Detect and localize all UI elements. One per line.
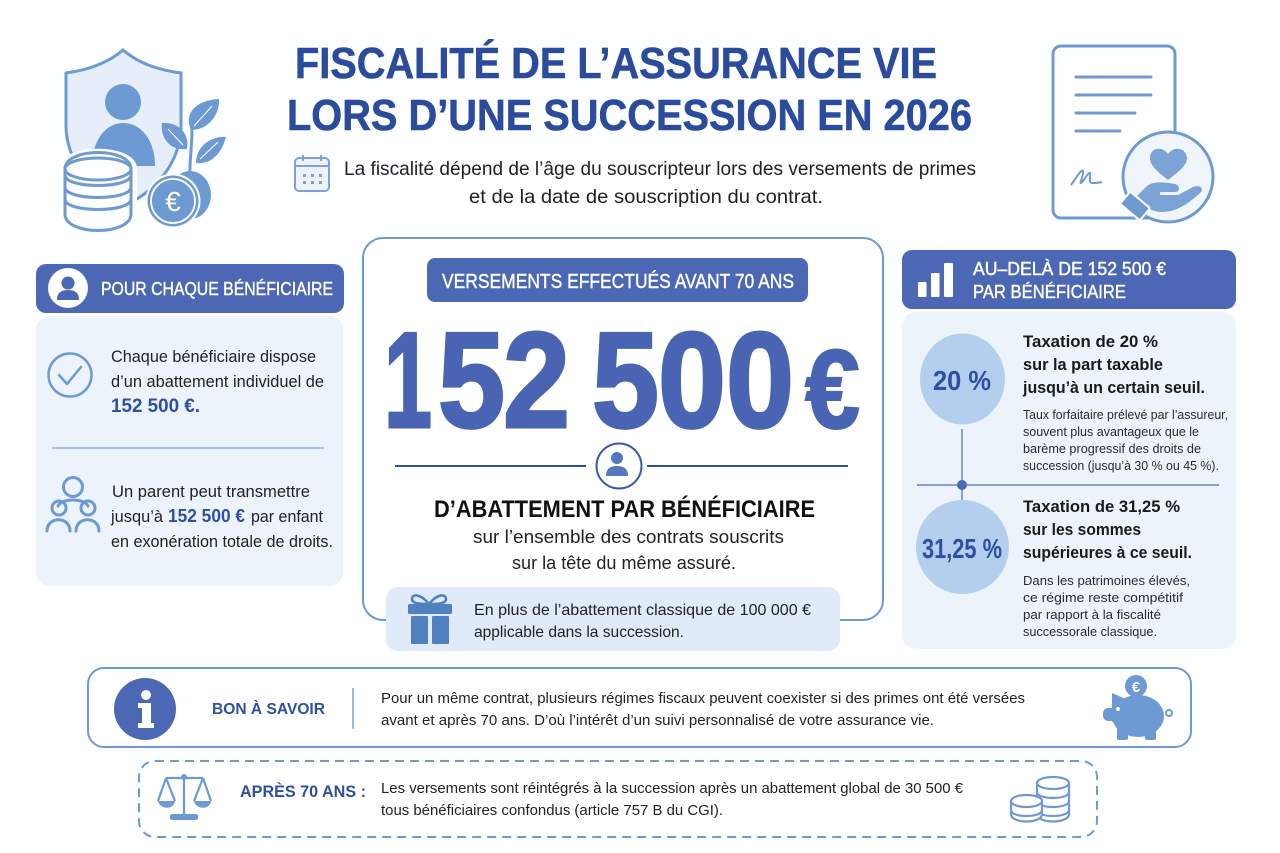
subtitle xyxy=(344,158,976,208)
header: pour chaque bénéficiaire: POUR CHAQUE BÉNÉFICIAIRE xyxy=(101,279,333,299)
header: au-delà de 152 500 €: PAR BÉNÉFICIAIRE xyxy=(973,282,1126,302)
text: versements réintégrés xyxy=(381,780,964,819)
text: transmission parent enfant: en exonération totale de droits. xyxy=(111,533,333,551)
text: taxation de 31,25 % xyxy=(1023,497,1192,639)
icon: check circle xyxy=(48,354,92,396)
text: transmission parent enfant: jusqu’à xyxy=(110,508,164,526)
text: ensemble des contrats: sur l’ensemble des contrats souscrits xyxy=(473,527,784,547)
title xyxy=(287,38,972,140)
big number: 152 500 €: € xyxy=(805,327,860,452)
header: au-delà de 152 500 €: AU–DELÀ DE 152 500 € xyxy=(973,259,1166,279)
text: versements réintégrés: tous bénéficiaires confondus (article 757 B du CGI). xyxy=(381,802,723,819)
text: taxation de 20 %: Taxation de 20 % xyxy=(1023,332,1158,351)
heading: bon à savoir: BON À SAVOIR xyxy=(212,699,325,718)
text: abattement individuel: Chaque bénéficiaire dispose xyxy=(111,348,316,366)
text: abattement classique: applicable dans la succession. xyxy=(474,624,684,641)
text: taxation de 31,25 %: ce régime reste compétitif xyxy=(1023,591,1184,605)
big number: 152 500 € xyxy=(384,304,860,456)
big number: 152 500 €: 2 xyxy=(503,304,570,456)
subtitle: La fiscalité dépend de l’âge du souscripteur lors des versements de primes xyxy=(344,158,976,180)
text: taxation de 20 %: sur la part taxable xyxy=(1023,355,1163,374)
icon: coin stacks xyxy=(1011,777,1069,822)
divider with person icon xyxy=(395,444,848,488)
callout: abattement classique xyxy=(386,587,840,651)
text: transmission parent enfant: Un parent peut transmettre xyxy=(112,483,310,501)
header: versements effectués avant 70 ans: VERSEMENTS EFFECTUÉS AVANT 70 ANS xyxy=(442,270,794,293)
badge: 20 % xyxy=(920,334,1005,424)
text: taxation de 20 %: barème progressif des droits de xyxy=(1023,442,1201,456)
text: plusieurs régimes: avant et après 70 ans. D’où l’intérêt d’un suivi personnalisé de votre assurance vie. xyxy=(381,712,934,729)
icon: piggy bank: € xyxy=(1132,679,1141,696)
text: versements réintégrés: Les versements sont réintégrés à la succession après un abattement global de 30 500 € xyxy=(381,780,964,797)
text: transmission parent enfant xyxy=(110,483,333,551)
icon: scales xyxy=(158,774,211,820)
text: plusieurs régimes xyxy=(381,690,1025,729)
text: taxation de 20 %: Taux forfaitaire prélevé par l’assureur, xyxy=(1023,408,1228,422)
text: abattement individuel: 152 500 €. xyxy=(111,396,200,417)
icon: gift xyxy=(408,595,452,644)
icon: parent and children xyxy=(47,478,99,531)
title: LORS D’UNE SUCCESSION EN 2026 xyxy=(287,91,972,140)
text: taxation de 20 % xyxy=(1022,332,1228,473)
heading: d'abattement par bénéficiaire: D’ABATTEMENT PAR BÉNÉFICIAIRE xyxy=(434,495,815,523)
text: transmission parent enfant: par enfant xyxy=(251,508,323,526)
text: abattement individuel: d’un abattement individuel de xyxy=(111,373,324,391)
text: abattement classique: En plus de l’abattement classique de 100 000 € xyxy=(474,602,811,619)
text: taxation de 20 %: succession (jusqu’à 30 % ou 45 %). xyxy=(1023,459,1219,473)
panel: bon à savoir xyxy=(88,668,1191,747)
big number: 152 500 €: 1 xyxy=(384,304,432,456)
text: plusieurs régimes: Pour un même contrat, plusieurs régimes fiscaux peuvent coexister si des primes ont été versées xyxy=(381,690,1025,707)
badge: 20 %: 20 % xyxy=(933,365,991,396)
text: ensemble des contrats: sur la tête du même assuré. xyxy=(512,553,736,573)
title: FISCALITÉ DE L’ASSURANCE VIE xyxy=(295,38,937,88)
subtitle: et de la date de souscription du contrat. xyxy=(469,186,823,208)
text: abattement classique xyxy=(474,602,811,641)
big number: 152 500 €: 5 xyxy=(592,304,659,456)
panel: pour chaque bénéficiaire xyxy=(36,264,344,586)
badge: 31,25 % xyxy=(916,500,1009,594)
big number: 152 500 €: 5 xyxy=(438,304,505,456)
icon: shield, coins and euro plant: € xyxy=(165,186,181,217)
text: transmission parent enfant: 152 500 € xyxy=(168,506,245,526)
panel: au-delà de 152 500 € xyxy=(902,250,1236,649)
text: taxation de 31,25 %: sur les sommes xyxy=(1023,520,1141,539)
text: taxation de 31,25 %: successorale classique. xyxy=(1023,625,1157,639)
panel: après 70 ans xyxy=(139,761,1097,837)
icon: info xyxy=(114,678,176,740)
text: taxation de 31,25 %: par rapport à la fiscalité xyxy=(1023,608,1161,622)
text: abattement individuel xyxy=(111,348,324,417)
heading: après 70 ans: APRÈS 70 ANS : xyxy=(240,782,366,801)
text: taxation de 20 %: jusqu’à un certain seuil. xyxy=(1022,378,1205,397)
badge: 31,25 %: 31,25 % xyxy=(922,533,1002,564)
text: taxation de 31,25 %: Taxation de 31,25 % xyxy=(1023,497,1180,516)
text: taxation de 20 %: souvent plus avantageux que le xyxy=(1023,425,1199,439)
text: ensemble des contrats xyxy=(473,527,784,573)
header: au-delà de 152 500 € xyxy=(902,250,1236,309)
icon: calendar xyxy=(295,155,329,191)
text: taxation de 31,25 %: supérieures à ce seuil. xyxy=(1023,543,1192,562)
icon: contract and caring hand xyxy=(1053,46,1213,222)
text: taxation de 31,25 %: Dans les patrimoines élevés, xyxy=(1023,574,1190,588)
icon: piggy bank xyxy=(1103,675,1172,740)
big number: 152 500 €: 0 xyxy=(726,304,794,456)
big number: 152 500 €: 0 xyxy=(658,304,726,456)
icon: shield, coins and euro plant xyxy=(62,50,226,232)
header: versements effectués avant 70 ans xyxy=(427,258,808,302)
header: pour chaque bénéficiaire xyxy=(36,264,344,313)
panel: versements avant 70 ans xyxy=(363,238,883,651)
